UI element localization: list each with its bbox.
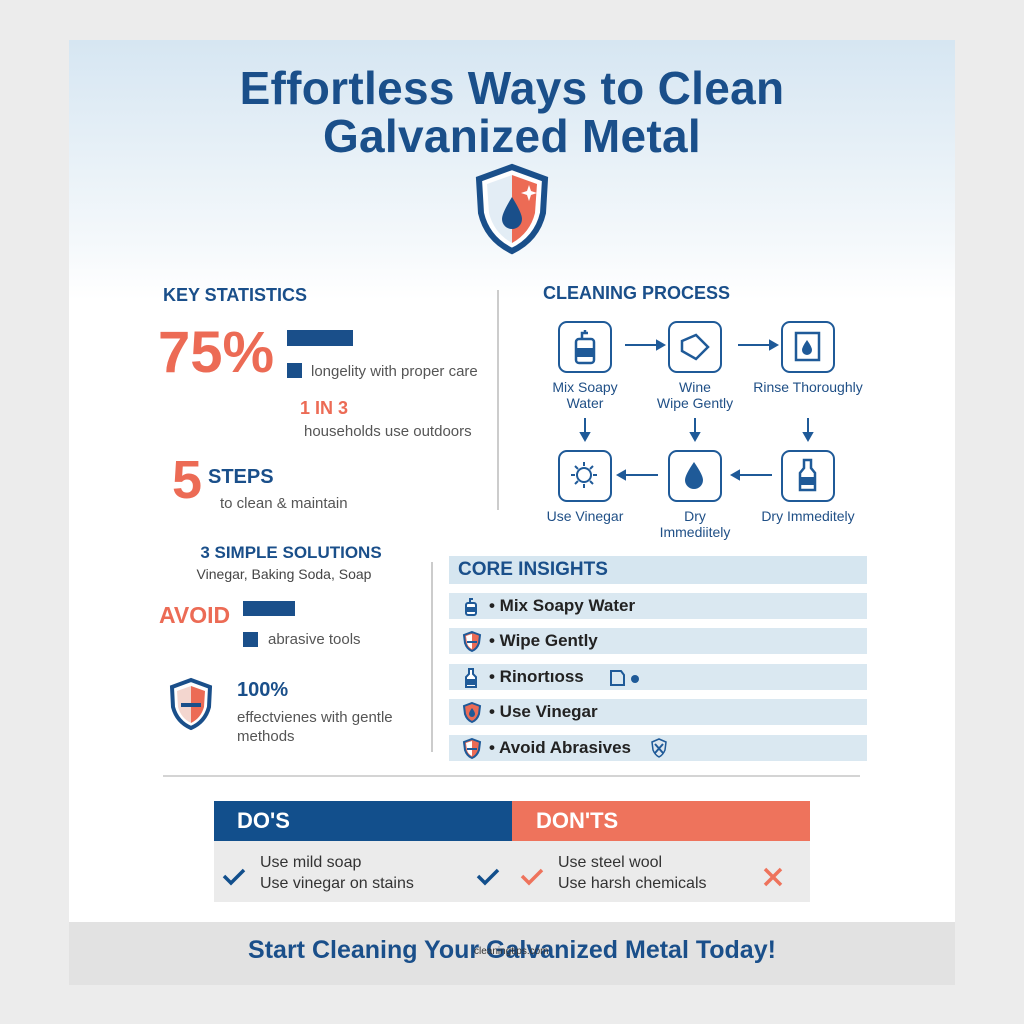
icon: shield 100% — [170, 678, 212, 730]
arrows — [579, 339, 814, 481]
process flow: Use Vinegar — [547, 508, 623, 524]
stat: 1 in 3: households use outdoors — [304, 423, 472, 440]
text: • Use Vinegar — [489, 702, 598, 721]
avoid: AVOID — [159, 602, 230, 628]
footer — [69, 922, 955, 985]
don'ts list — [558, 854, 706, 892]
stat: 75%: 75% — [158, 320, 274, 385]
stat: 100%: methods — [237, 728, 295, 745]
title — [240, 62, 784, 162]
text: • Rinortıoss — [489, 667, 584, 686]
solutions: Vinegar, Baking Soda, Soap — [197, 566, 371, 582]
process flow — [547, 321, 863, 540]
process flow: Rinse Thoroughly — [753, 379, 863, 395]
process flow: Mix Soapy — [552, 379, 618, 395]
stat: 5 steps: STEPS — [208, 466, 274, 488]
heading: cleaning process: CLEANING PROCESS — [543, 283, 730, 303]
process flow: Immediitely — [660, 524, 730, 540]
step: dry — [668, 450, 722, 502]
footer: Start Cleaning Your Galvanized Metal Today! — [248, 936, 776, 964]
stat: 100%: effectvienes with gentle — [237, 709, 393, 726]
stat: 75% — [158, 320, 478, 385]
don'ts list: Use steel wool — [558, 854, 662, 871]
do's list — [260, 854, 414, 892]
stat: 100% — [237, 679, 393, 745]
process flow: Wipe Gently — [657, 395, 733, 411]
step: mix soapy water — [558, 321, 612, 373]
insight rows: • Mix Soapy Water — [489, 596, 635, 615]
avoid — [159, 601, 361, 648]
stat: 5 steps: to clean & maintain — [220, 495, 348, 512]
header: do's: DO'S — [237, 808, 290, 833]
insight rows — [449, 593, 867, 619]
don'ts list: Use harsh chemicals — [558, 875, 706, 892]
solutions — [196, 543, 382, 582]
stat: 5 steps — [172, 450, 348, 512]
title: Galvanized Metal — [323, 110, 701, 162]
stat: 100%: 100% — [237, 679, 288, 701]
text: • Wipe Gently — [489, 631, 598, 650]
title: Effortless Ways to Clean — [240, 62, 784, 114]
panel: do's and don'ts — [214, 801, 810, 902]
header: don'ts — [512, 801, 810, 841]
step: dry immediately — [781, 450, 835, 502]
header: do's — [214, 801, 512, 841]
do's list: Use vinegar on stains — [260, 875, 414, 892]
process flow: Dry Immeditely — [761, 508, 855, 524]
process flow: Dry — [684, 508, 706, 524]
step: wipe gently — [668, 321, 722, 373]
panel: core insights: CORE INSIGHTS — [458, 559, 608, 580]
stat: 5 steps: 5 — [172, 450, 202, 510]
step: rinse — [781, 321, 835, 373]
avoid: abrasive tools — [268, 631, 361, 648]
stat: 1 in 3 — [300, 398, 472, 440]
card — [69, 40, 955, 985]
step: use vinegar — [558, 450, 612, 502]
process flow: Water — [567, 395, 603, 411]
header: don'ts: DON'TS — [536, 808, 618, 833]
stat: 1 in 3: 1 IN 3 — [300, 398, 348, 418]
icon: shield with drop — [476, 164, 548, 254]
solutions: 3 SIMPLE SOLUTIONS — [200, 543, 382, 562]
process flow: Wine — [679, 379, 711, 395]
footer: cleaningtips.com — [474, 946, 548, 957]
heading: key statistics: KEY STATISTICS — [163, 285, 307, 305]
text: • Avoid Abrasives — [489, 738, 631, 757]
do's list: Use mild soap — [260, 854, 361, 871]
stat: 75%: longelity with proper care — [311, 363, 478, 380]
